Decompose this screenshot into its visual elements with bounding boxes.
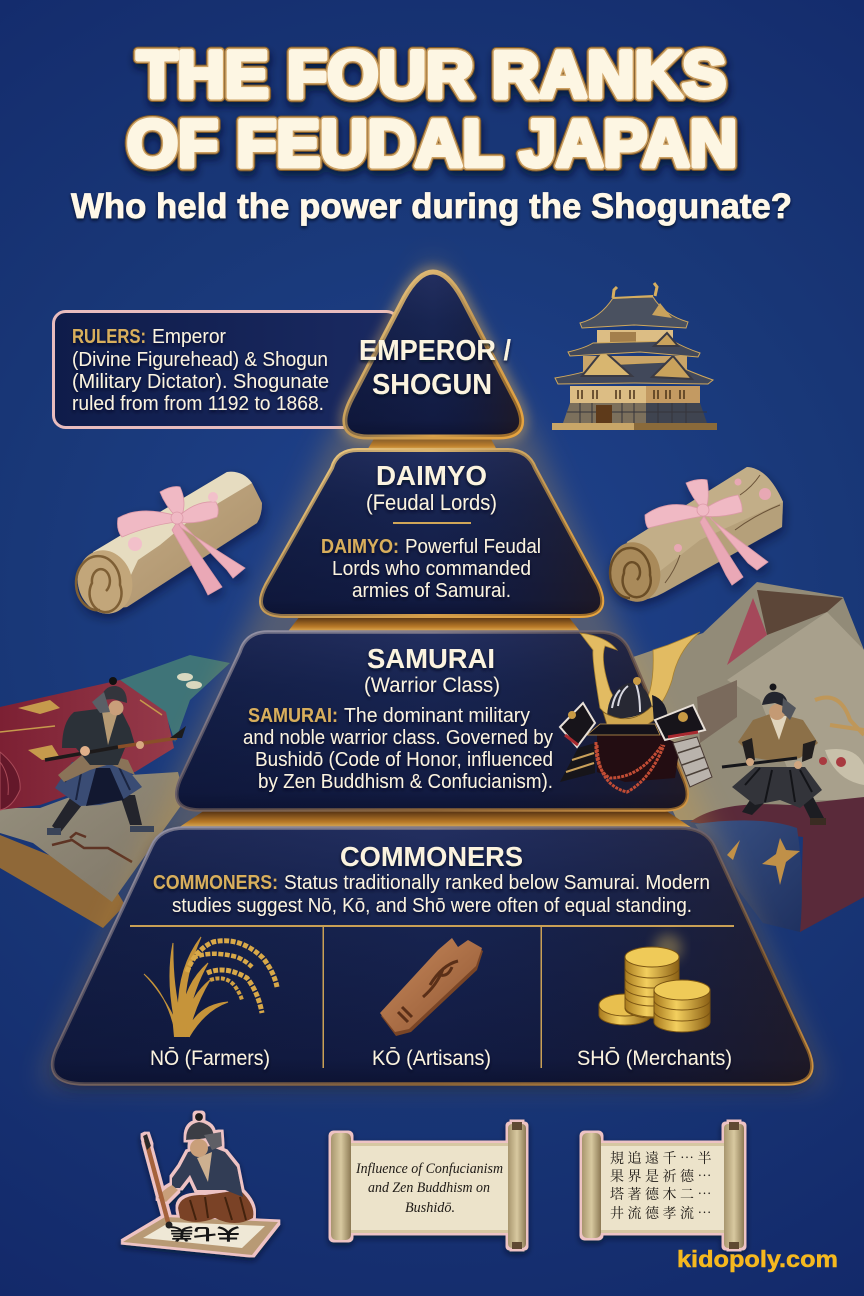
daimyo text: armies of Samurai.: [352, 580, 511, 602]
title: THE FOUR RANKS: [137, 37, 726, 111]
daimyo text: DAIMYO:: [321, 536, 399, 558]
calligraphy text: 果界是祈德⋯: [610, 1166, 715, 1186]
commoners text: studies suggest Nō, Kō, and Shō were often of equal standing.: [172, 895, 692, 917]
ribbon: [118, 487, 245, 595]
samurai heading: SAMURAI: [367, 643, 495, 674]
title: OF FEUDAL JAPAN: [127, 106, 737, 180]
rulers text: RULERS:: [72, 326, 146, 348]
scroll right: [603, 467, 783, 607]
scroll text: Bushidō.: [405, 1200, 455, 1216]
samurai subtitle: (Warrior Class): [364, 674, 500, 697]
icon: coins: [599, 934, 710, 1032]
scroll left: [71, 472, 262, 620]
commoners text: Status traditionally ranked below Samurai. Modern: [284, 872, 710, 894]
tier: emperor shogun: [345, 272, 522, 437]
calligraphy text: 塔著德木二⋯: [610, 1184, 715, 1204]
title: [127, 37, 737, 180]
samurai text: The dominant military: [344, 705, 530, 727]
title: THE FOUR RANKS: [137, 37, 726, 111]
icon: castle: [552, 283, 717, 430]
rulers text: Emperor: [152, 326, 226, 348]
scroll: calligraphy: [582, 1122, 744, 1249]
figure: samurai right: [722, 684, 826, 825]
figure: bottom samurai with brush: [123, 1113, 278, 1255]
fabric left: [0, 655, 230, 928]
icon: rice: [144, 937, 277, 1037]
tier: commoners: [53, 828, 812, 1090]
tier label: EMPEROR /: [359, 335, 511, 367]
glow behind pyramid: [40, 255, 825, 1084]
subtitle: Who held the power during the Shogunate?: [71, 187, 792, 226]
samurai text: SAMURAI:: [248, 705, 338, 727]
figure: samurai left: [45, 677, 186, 835]
connectors: [175, 437, 695, 830]
scroll: influence of confucianism: [331, 1122, 526, 1249]
tier: daimyo: [261, 450, 602, 616]
samurai text: Bushidō (Code of Honor, influenced: [255, 749, 553, 771]
calligraphy text: 井流德孝流⋯: [610, 1203, 715, 1223]
panel: rulers callout: [54, 312, 398, 428]
ribbon: [645, 479, 768, 585]
tier label: SHOGUN: [372, 369, 492, 401]
daimyo text: Lords who commanded: [332, 558, 531, 580]
figure: bottom samurai with brush: 夫七美: [170, 1224, 240, 1243]
calligraphy text: [610, 1148, 715, 1223]
scroll text: and Zen Buddhism on: [368, 1180, 490, 1196]
scroll text: Influence of Confucianism: [355, 1161, 503, 1177]
tier: samurai: [177, 632, 687, 810]
daimyo heading: DAIMYO: [376, 460, 487, 491]
commoners text: COMMONERS:: [153, 872, 278, 894]
label: no: NŌ (Farmers): [150, 1047, 270, 1070]
title: OF FEUDAL JAPAN: [127, 106, 737, 180]
label: ko: KŌ (Artisans): [372, 1047, 491, 1070]
rulers text: ruled from from 1192 to 1868.: [72, 393, 324, 415]
samurai text: and noble warrior class. Governed by: [243, 727, 553, 749]
label: sho: SHŌ (Merchants): [577, 1047, 732, 1070]
samurai text: by Zen Buddhism & Confucianism).: [258, 771, 553, 793]
daimyo subtitle: (Feudal Lords): [366, 490, 497, 515]
rulers text: (Divine Figurehead) & Shogun: [72, 349, 328, 371]
scroll text: [355, 1161, 503, 1216]
title: THE FOUR RANKS: [137, 37, 726, 111]
daimyo text: Powerful Feudal: [405, 536, 541, 558]
rulers text: (Military Dictator). Shogunate: [72, 371, 329, 393]
icon: helmet: [560, 632, 712, 792]
icon: chisel: [380, 938, 483, 1036]
commoners heading: COMMONERS: [340, 841, 523, 872]
tier label: [359, 335, 511, 401]
brand: kidopoly.com: kidopoly.com: [677, 1246, 838, 1272]
calligraphy text: 規追遠千⋯半: [610, 1148, 715, 1168]
fabric right: [633, 582, 864, 932]
title: OF FEUDAL JAPAN: [127, 106, 737, 180]
